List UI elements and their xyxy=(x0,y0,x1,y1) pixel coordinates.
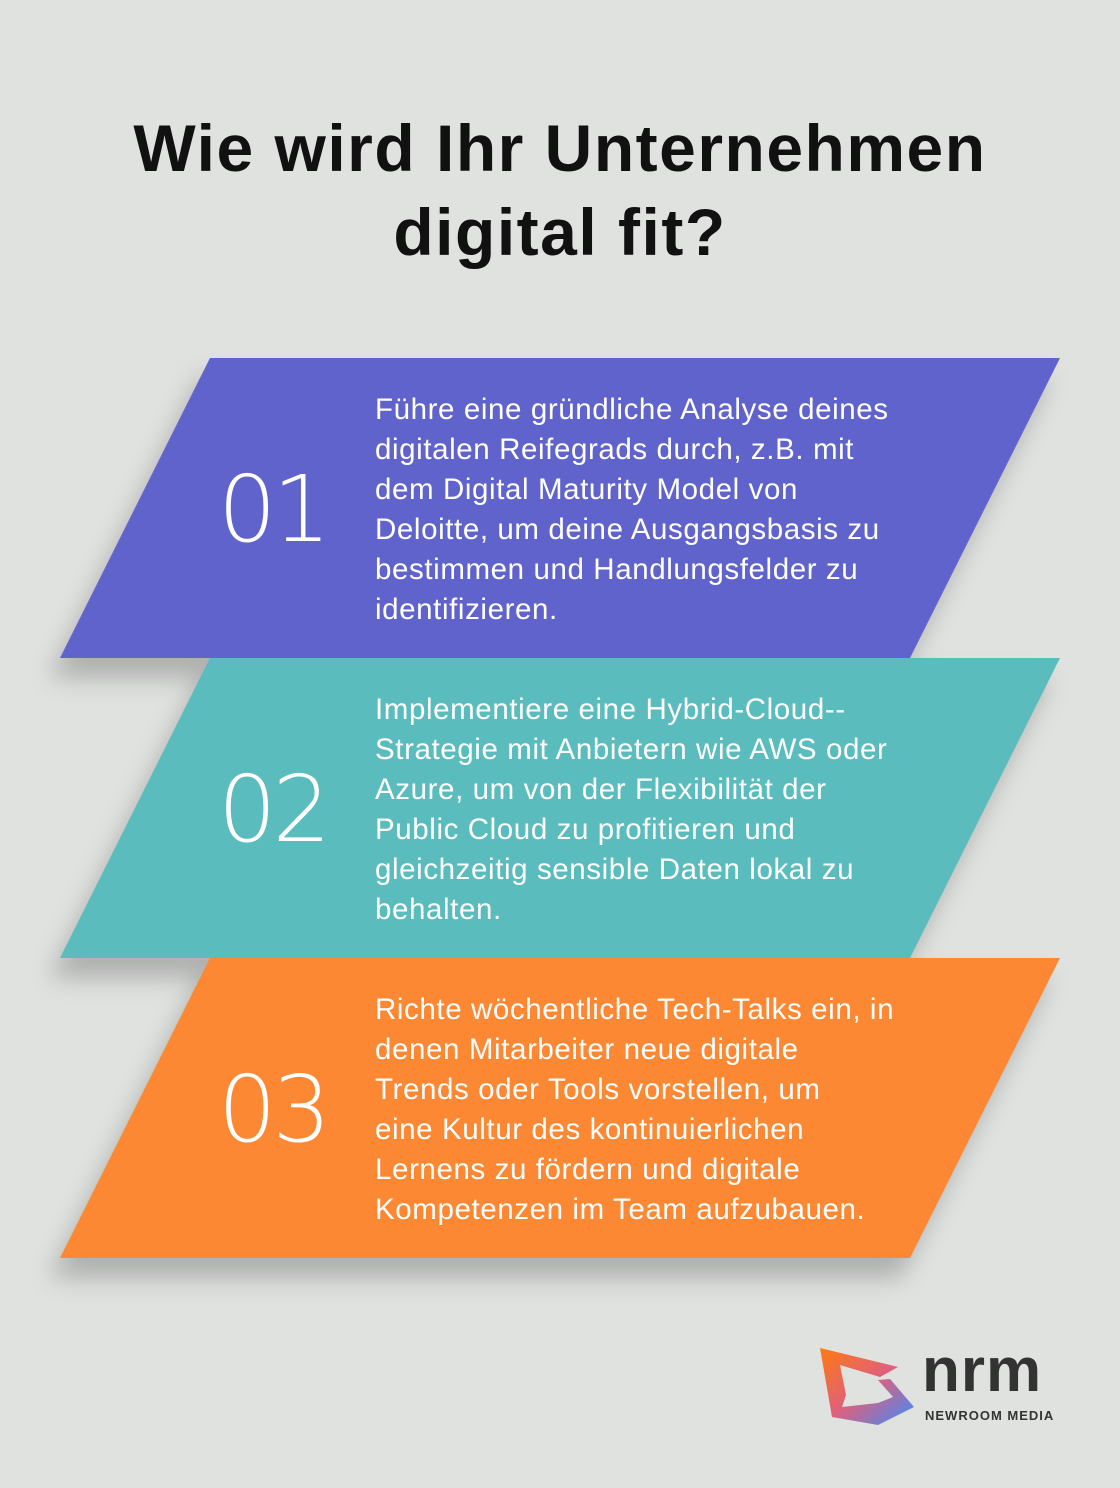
number 03: 03 xyxy=(218,1056,327,1163)
text 02: Implementiere eine Hybrid-Cloud-- xyxy=(375,693,846,726)
text 03: Richte wöchentliche Tech-Talks ein, in xyxy=(375,993,894,1026)
logo xyxy=(820,1336,1054,1425)
text 02: Public Cloud zu profitieren und xyxy=(375,813,795,846)
text 02 xyxy=(375,693,887,926)
panel: step 02 xyxy=(218,693,887,926)
text 01: identifizieren. xyxy=(375,593,558,626)
text 01: bestimmen und Handlungsfelder zu xyxy=(375,553,858,586)
text 01: Führe eine gründliche Analyse deines xyxy=(375,393,889,426)
panel: step 03 xyxy=(218,993,894,1226)
logo text: nrm xyxy=(922,1336,1042,1405)
text 03 xyxy=(375,993,894,1226)
text 01 xyxy=(375,393,889,626)
title xyxy=(133,111,987,269)
logo: NEWROOM MEDIA xyxy=(925,1408,1054,1423)
text 03: denen Mitarbeiter neue digitale xyxy=(375,1033,799,1066)
title: Wie wird Ihr Unternehmen xyxy=(133,111,987,185)
title: digital fit? xyxy=(393,195,727,269)
text 03: Kompetenzen im Team aufzubauen. xyxy=(375,1193,865,1226)
text 03: eine Kultur des kontinuierlichen xyxy=(375,1113,804,1146)
text 01: digitalen Reifegrads durch, z.B. mit xyxy=(375,433,854,466)
text 01: dem Digital Maturity Model von xyxy=(375,473,798,506)
text 01: Deloitte, um deine Ausgangsbasis zu xyxy=(375,513,880,546)
text 03: Trends oder Tools vorstellen, um xyxy=(375,1073,821,1106)
panel: step 01 xyxy=(218,393,889,626)
number 01: 01 xyxy=(218,456,327,563)
text 03: Lernens zu fördern und digitale xyxy=(375,1153,800,1186)
icon: logo mark xyxy=(820,1348,914,1425)
text 02: Azure, um von der Flexibilität der xyxy=(375,773,827,806)
text 02: Strategie mit Anbietern wie AWS oder xyxy=(375,733,887,766)
number 02: 02 xyxy=(218,756,327,863)
text 02: gleichzeitig sensible Daten lokal zu xyxy=(375,853,854,886)
text 02: behalten. xyxy=(375,893,502,926)
